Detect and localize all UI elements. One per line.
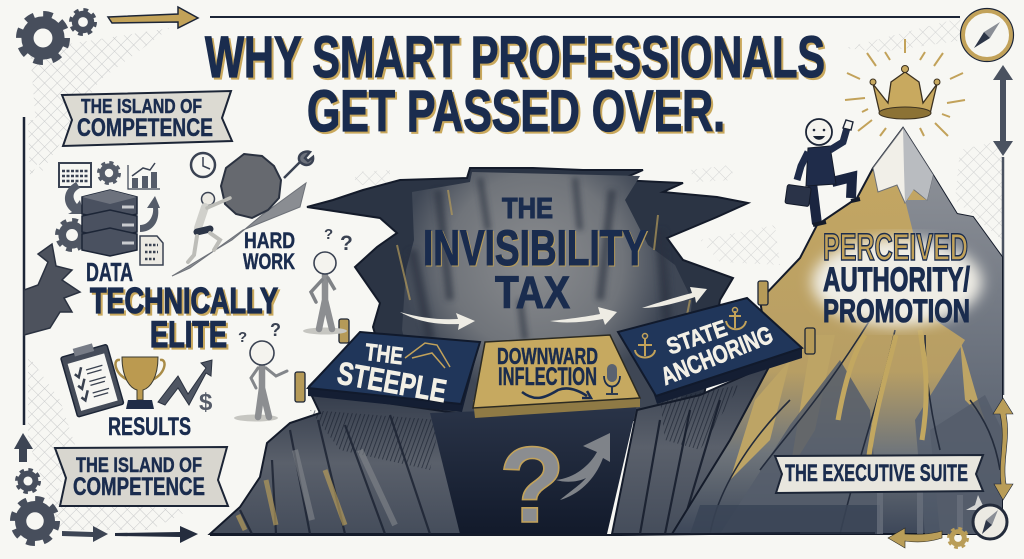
arrow: white middle — [550, 307, 617, 325]
plank: state anchoring: ANCHORING — [657, 321, 777, 391]
chasm: left lower rock — [210, 392, 470, 534]
illustration: thinking person upper — [303, 226, 353, 334]
chasm: right lower rock — [612, 360, 780, 534]
icon: rising arrow and dollar: $ — [199, 389, 213, 416]
arrow: white left — [400, 312, 475, 330]
label: perceived authority/promotion: PROMOTION — [823, 293, 970, 329]
plank: state anchoring — [618, 298, 802, 404]
icon: small gear top left — [71, 10, 95, 34]
arrow: up, bottom left — [14, 433, 33, 462]
chasm: dark pit — [430, 405, 637, 534]
icon: question mark in pit: ? — [499, 424, 565, 545]
banner: island of competence bottom — [55, 447, 228, 506]
label: the invisibility tax — [423, 193, 647, 318]
mountain: glow behind label — [812, 238, 982, 326]
title — [205, 25, 825, 144]
icon: gold half gear — [4, 70, 40, 106]
illustration: confused person lower: ? — [238, 329, 247, 346]
plank: downward inflection — [473, 335, 640, 418]
banner: island of competence bottom: COMPETENCE — [73, 473, 205, 501]
illustration: boulder — [221, 154, 281, 218]
label: results: RESULTS — [108, 413, 191, 441]
plank: the steeple — [308, 332, 480, 412]
arrow: bottom short — [62, 526, 108, 542]
icon: large gear top left — [19, 14, 67, 62]
hatch pattern: top left corner — [28, 28, 170, 178]
frame: bottom right rule — [740, 532, 875, 534]
posts — [295, 281, 815, 402]
arrow: gold double vertical right — [993, 398, 1013, 500]
mountain — [672, 128, 1002, 534]
icon: large gear bottom left — [13, 499, 57, 543]
arrow: double vertical top right — [993, 65, 1013, 156]
icon: small gold gear bottom right — [948, 528, 968, 548]
hatch pattern: top right corner — [845, 18, 1002, 240]
label: the invisibility tax: TAX — [495, 267, 570, 318]
illustration: confused person lower: ? — [270, 320, 281, 340]
label: the invisibility tax: THE — [502, 193, 553, 225]
frame: left rule — [23, 117, 25, 425]
frame: top rule — [210, 16, 960, 18]
heading: technically elite: TECHNICALLY — [90, 280, 278, 321]
illustration: climbing businessman — [785, 119, 860, 225]
plank: the steeple: THE — [364, 339, 405, 370]
heading: technically elite — [90, 280, 278, 355]
illustration: hard work slope — [172, 183, 306, 276]
label: hard work: WORK — [243, 249, 295, 274]
plank: state anchoring: STATE — [663, 315, 730, 359]
icon: clock — [191, 153, 215, 177]
chasm: back wall — [307, 168, 748, 420]
illustration: thinking person upper: ? — [324, 226, 333, 243]
hatch pattern: bottom left corner — [28, 355, 190, 530]
icon: half gear right — [986, 90, 1016, 120]
illustration: left broken cliff — [24, 244, 80, 335]
icon: data cluster — [57, 162, 163, 265]
banner: island of competence top — [62, 91, 232, 146]
banner: the executive suite — [775, 455, 983, 493]
label: perceived authority/promotion — [823, 227, 970, 329]
icon: compass bottom right — [966, 495, 1007, 539]
heading: technically elite: ELITE — [150, 314, 227, 355]
plank: downward inflection: DOWNWARD — [497, 343, 598, 369]
label: hard work — [243, 228, 295, 274]
hatch pattern: chasm sides — [355, 165, 780, 265]
icon: crown with rays — [845, 39, 965, 136]
banner: island of competence bottom: THE ISLAND OF — [76, 454, 202, 477]
plank: downward inflection: INFLECTION — [498, 363, 597, 391]
frame: base line — [210, 533, 800, 535]
arrow: gold left bottom — [888, 528, 942, 548]
banner: island of competence top: COMPETENCE — [77, 114, 213, 142]
icon: compass top right — [960, 8, 1014, 62]
arrow: white right — [642, 287, 707, 308]
label: hard work: HARD — [244, 228, 295, 253]
illustration: man pushing boulder — [188, 192, 230, 262]
illustration: confused person lower — [234, 320, 287, 422]
icon: wrench — [284, 152, 313, 178]
label: the invisibility tax: INVISIBILITY — [423, 220, 647, 276]
arrow: bottom long — [115, 526, 198, 543]
arrow: grey up right in pit — [556, 433, 610, 500]
arrow: gold top — [108, 7, 198, 28]
icon: rising arrow and dollar — [158, 360, 213, 416]
frame: right rule — [1002, 157, 1004, 395]
icon: clipboard — [59, 339, 124, 417]
illustration: thinking person upper: ? — [340, 232, 353, 255]
icon: trophy — [115, 357, 165, 409]
icon: small gear bottom left — [17, 470, 39, 492]
label: data: DATA — [86, 257, 133, 287]
plank: the steeple: STEEPLE — [335, 355, 449, 409]
title: GET PASSED OVER. — [307, 79, 725, 144]
banner: island of competence top: THE ISLAND OF — [81, 96, 202, 118]
